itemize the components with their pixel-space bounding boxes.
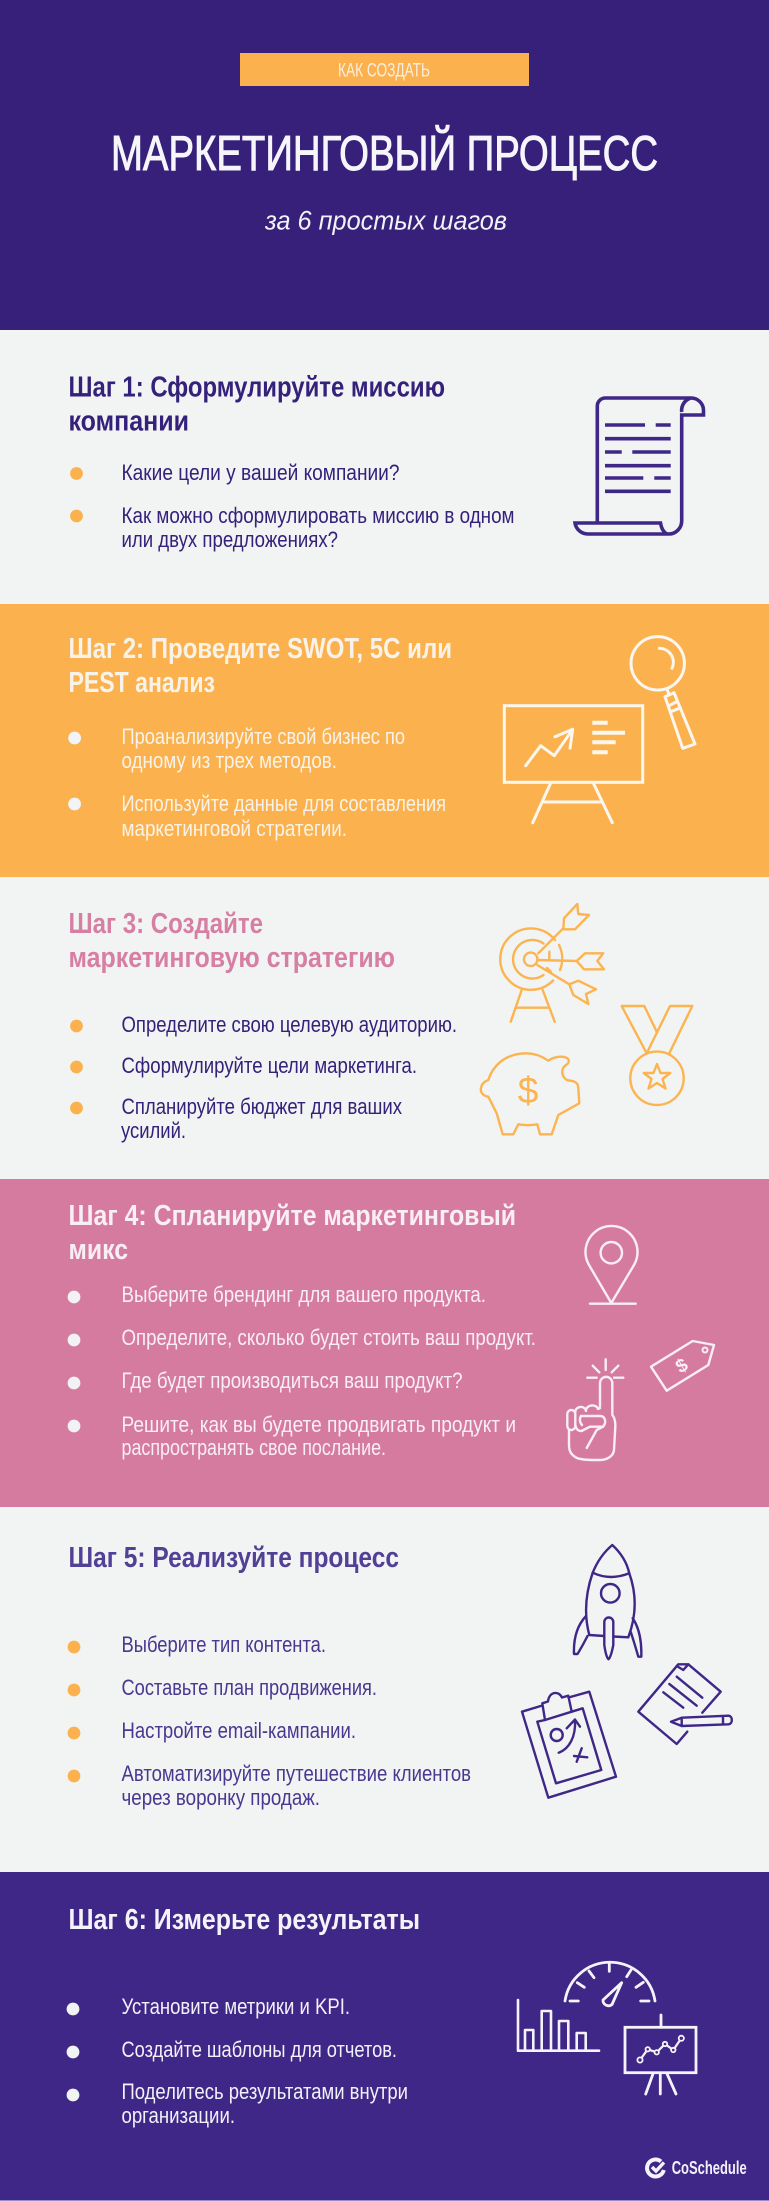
- bullet list: step 6: организации.: [122, 2103, 235, 2128]
- bullet list: step 6: Создайте шаблоны для отчетов.: [122, 2037, 397, 2062]
- tag: how to create: КАК СОЗДАТЬ: [338, 60, 430, 82]
- bullet list: step 2: маркетинговой стратегии.: [122, 816, 347, 841]
- icon: price tag: $: [672, 1354, 692, 1378]
- tag: how to create: [240, 53, 529, 86]
- heading: step 4: микс: [68, 1234, 128, 1266]
- icon: paper and pencil: [638, 1664, 732, 1744]
- logo: CoSchedule: [647, 2158, 747, 2178]
- heading: step 3: маркетинговую стратегию: [68, 942, 395, 974]
- icon: pointing hand: [567, 1359, 623, 1460]
- panel: step 5: [0, 1507, 769, 1872]
- bullet list: step 6: Установите метрики и KPI.: [122, 1994, 350, 2019]
- icon: gauge: [565, 1962, 655, 2006]
- bullet list: step 6: Поделитесь результатами внутри: [122, 2079, 408, 2104]
- bullet list: step 1: [70, 460, 514, 552]
- heading: step 2: PEST анализ: [68, 667, 215, 699]
- panel: step 3: [0, 877, 769, 1179]
- bullet list: step 4: [68, 1282, 536, 1460]
- bullet list: step 5: Составьте план продвижения.: [122, 1675, 377, 1700]
- bullet list: step 5: Автоматизируйте путешествие клиентов: [122, 1761, 471, 1786]
- icon: bar chart: [518, 2000, 599, 2051]
- bullet list: step 5: через воронку продаж.: [122, 1785, 320, 1810]
- bullet list: step 5: Выберите тип контента.: [122, 1632, 326, 1657]
- panel: header: [0, 0, 769, 330]
- bullet list: step 1: или двух предложениях?: [122, 527, 338, 552]
- heading: step 6: Шаг 6: Измерьте результаты: [68, 1904, 420, 1936]
- icon: line chart board: [625, 2015, 696, 2094]
- bullet list: step 2: [68, 724, 446, 841]
- icon: rocket: [574, 1545, 641, 1659]
- heading: step 1: Шаг 1: Сформулируйте миссию: [68, 372, 445, 404]
- icon: map pin: [586, 1226, 638, 1304]
- bullet list: step 4: Решите, как вы будете продвигать продукт и: [122, 1412, 516, 1437]
- bullet list: step 5: Настройте email-кампании.: [122, 1718, 356, 1743]
- heading: step 2: [68, 633, 452, 699]
- icon: medal: [622, 1006, 692, 1105]
- icon: piggy bank: [481, 1053, 579, 1134]
- bullet list: step 5: [68, 1632, 471, 1810]
- bullet list: step 3: Сформулируйте цели маркетинга.: [122, 1053, 417, 1078]
- bullet list: step 3: [70, 1012, 457, 1143]
- bullet list: step 2: Проанализируйте свой бизнес по: [122, 724, 405, 749]
- heading: step 3: Шаг 3: Создайте: [68, 908, 263, 940]
- panel: step 1: [0, 330, 769, 604]
- bullet list: step 2: Используйте данные для составления: [122, 791, 446, 816]
- heading: step 4: Шаг 4: Спланируйте маркетинговый: [68, 1200, 516, 1232]
- bullet list: step 1: Как можно сформулировать миссию в одном: [122, 503, 514, 528]
- bullet list: step 6: [67, 1994, 408, 2128]
- panel: step 2: [0, 604, 769, 877]
- icon: presentation board: [504, 706, 643, 823]
- icon: price tag: [651, 1341, 714, 1391]
- bullet list: step 4: Выберите брендинг для вашего продукта.: [122, 1282, 486, 1307]
- panel: step 6: [0, 1872, 769, 2201]
- bullet list: step 2: одному из трех методов.: [122, 748, 337, 773]
- panel: step 4: [0, 1179, 769, 1507]
- heading: step 5: Шаг 5: Реализуйте процесс: [68, 1542, 399, 1574]
- bullet list: step 1: Какие цели у вашей компании?: [122, 460, 400, 485]
- bullet list: step 3: Спланируйте бюджет для ваших: [122, 1094, 402, 1119]
- icon: clipboard: [522, 1692, 616, 1798]
- icon: target with arrows: [500, 904, 604, 1022]
- heading: step 1: компании: [68, 406, 189, 438]
- heading: step 2: Шаг 2: Проведите SWOT, 5C или: [68, 633, 452, 665]
- heading: step 4: [68, 1200, 516, 1266]
- icon: piggy bank: $: [518, 1070, 538, 1111]
- heading: step 3: [68, 908, 395, 974]
- bullet list: step 4: распространять свое послание.: [122, 1435, 386, 1460]
- bullet list: step 4: Где будет производиться ваш продукт?: [122, 1368, 462, 1393]
- subtitle: за 6 простых шагов: [264, 206, 507, 236]
- bullet list: step 3: Определите свою целевую аудиторию.: [122, 1012, 457, 1037]
- icon: scroll document: [575, 398, 704, 534]
- heading: step 1: [68, 372, 445, 438]
- bullet list: step 3: усилий.: [121, 1118, 186, 1143]
- bullet list: step 4: Определите, сколько будет стоить ваш продукт.: [122, 1325, 536, 1350]
- icon: magnifying glass: [631, 637, 695, 748]
